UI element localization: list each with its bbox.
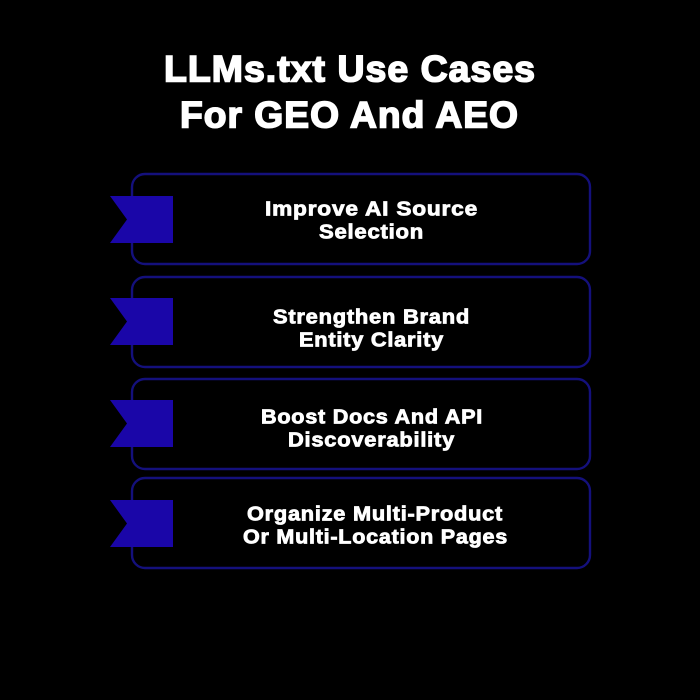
title xyxy=(164,48,536,136)
icon: ribbon tag 4 xyxy=(110,500,173,547)
panel: strengthen brand entity clarity xyxy=(110,277,590,367)
panel: strengthen brand entity clarity: Strengthen Brand xyxy=(273,306,470,328)
panel: boost docs and API discoverability: Discoverability xyxy=(288,430,455,452)
panel: boost docs and API discoverability: Boost Docs And API xyxy=(261,406,483,428)
icon: ribbon tag 2 xyxy=(110,298,173,345)
panel: organize multi-product or multi-location pages xyxy=(110,478,590,568)
panel: organize multi-product or multi-location pages: Organize Multi-Product xyxy=(247,504,503,526)
panel: boost docs and API discoverability xyxy=(110,379,590,469)
panel: improve AI source selection: Selection xyxy=(319,222,424,244)
title: For GEO And AEO xyxy=(180,94,519,136)
icon: ribbon tag 1 xyxy=(110,196,173,243)
panel: strengthen brand entity clarity: Entity Clarity xyxy=(299,330,444,352)
title: LLMs.txt Use Cases xyxy=(164,48,536,90)
panel: improve AI source selection: Improve AI Source xyxy=(265,198,478,220)
icon: ribbon tag 3 xyxy=(110,400,173,447)
panel: organize multi-product or multi-location pages: Or Multi-Location Pages xyxy=(243,526,508,548)
panel: improve AI source selection xyxy=(110,174,590,264)
